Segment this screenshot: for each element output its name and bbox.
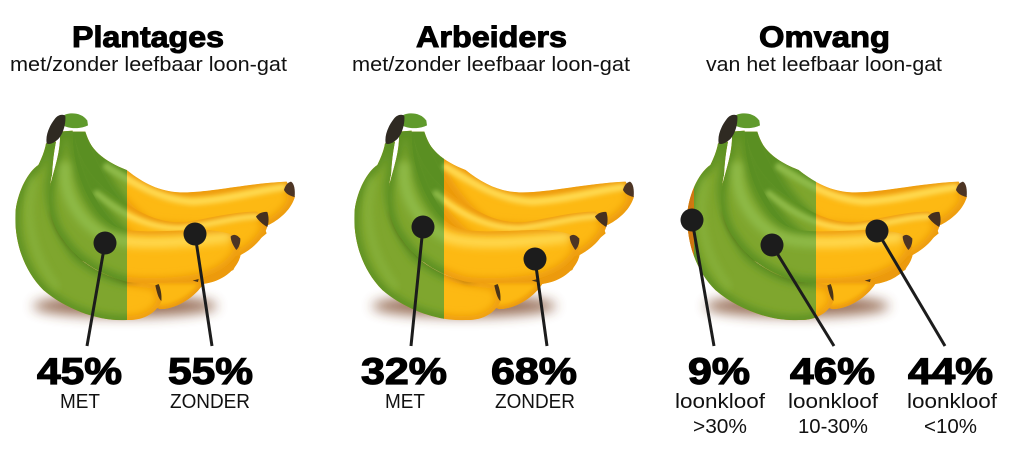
panel: Plantages <box>10 21 295 413</box>
number: 32%: 32% <box>361 351 447 392</box>
subtitle: Plantages: met/zonder leefbaar loon-gat <box>10 53 287 76</box>
marker: 32% met <box>411 216 434 346</box>
number: 45%: 45% <box>37 351 122 392</box>
label: ZONDER: ZONDER <box>170 390 250 413</box>
label: ZONDER: ZONDER <box>495 390 575 413</box>
heading: Omvang: Omvang <box>759 21 890 54</box>
label: MET: MET <box>385 390 425 413</box>
label: loonkloof 10-30%: 10-30% <box>798 415 868 438</box>
panel: Omvang <box>675 21 997 438</box>
number: 68%: 68% <box>491 351 577 392</box>
label: loonkloof 10-30%: loonkloof <box>788 390 878 413</box>
heading: Arbeiders: Arbeiders <box>416 21 567 54</box>
heading: Plantages: Plantages <box>72 21 224 54</box>
number: 55%: 55% <box>168 351 253 392</box>
label: loonkloof >30%: loonkloof <box>675 390 765 413</box>
number: 44%: 44% <box>908 351 993 392</box>
number: 9%: 9% <box>688 351 750 392</box>
chart: banana split 9/46/44 <box>687 113 967 320</box>
label: loonkloof 10-30% <box>788 390 878 438</box>
marker: 45% met <box>87 232 116 346</box>
label: loonkloof <10%: <10% <box>924 415 977 438</box>
label: loonkloof >30% <box>675 390 765 438</box>
panel: Arbeiders <box>352 21 634 413</box>
marker: 46% <box>760 234 834 346</box>
label: MET: MET <box>60 390 100 413</box>
number: 46%: 46% <box>790 351 875 392</box>
marker: 9% <box>680 208 714 346</box>
marker: 44% <box>866 220 945 346</box>
chart: banana split 32/68 <box>354 113 634 320</box>
subtitle: Arbeiders: met/zonder leefbaar loon-gat <box>352 53 630 76</box>
chart: banana split 45/55 <box>15 113 295 320</box>
subtitle: Omvang: van het leefbaar loon-gat <box>706 53 942 76</box>
marker: 68% zonder <box>524 248 547 346</box>
label: loonkloof <10%: loonkloof <box>907 390 997 413</box>
marker: 55% zonder <box>184 222 212 346</box>
label: loonkloof >30%: >30% <box>693 415 747 438</box>
label: loonkloof <10% <box>907 390 997 438</box>
